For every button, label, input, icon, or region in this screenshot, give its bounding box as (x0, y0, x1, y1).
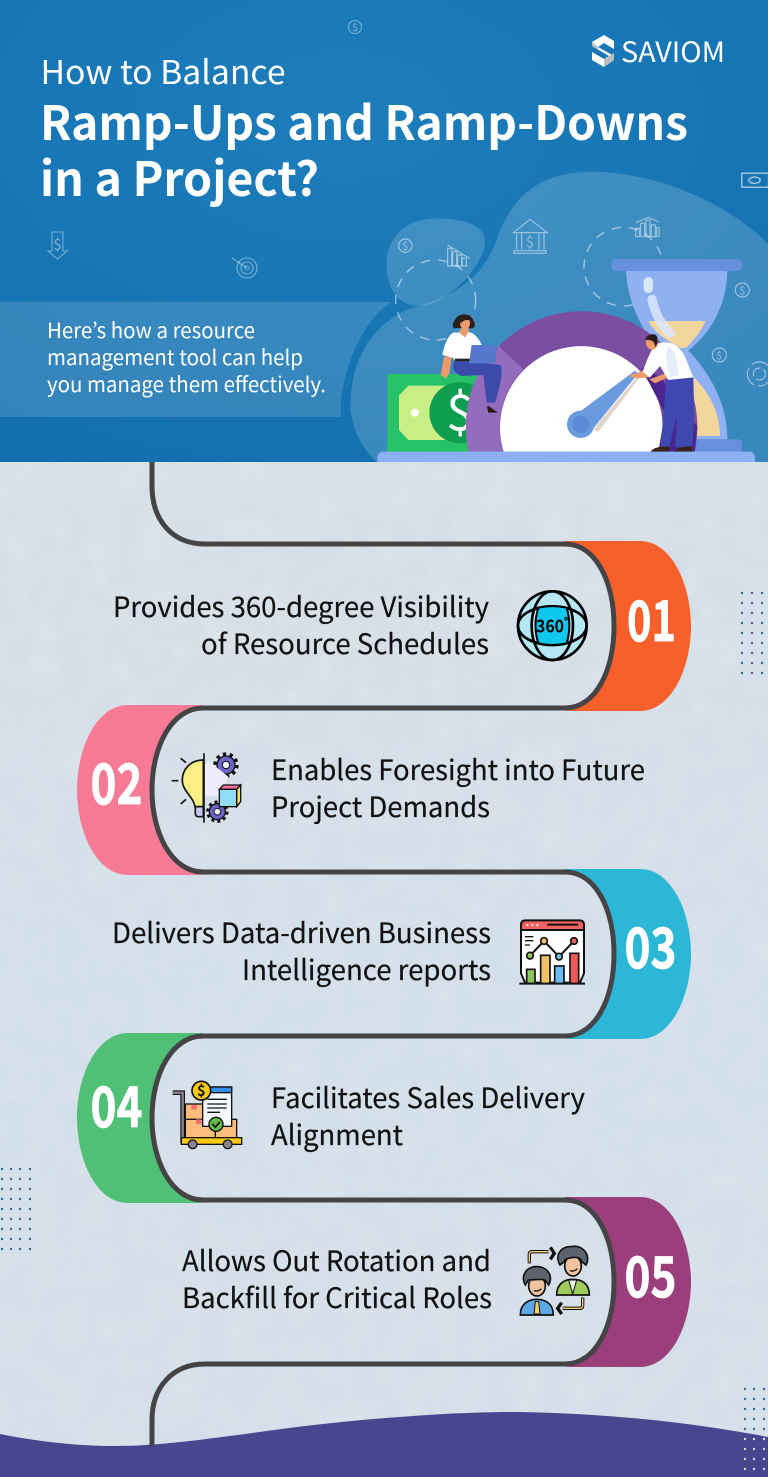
title: Ramp-Ups and Ramp-Downs (40, 85, 688, 154)
tab 04: 04 (90, 1063, 142, 1144)
step 2 text: Enables Foresight into Future (271, 749, 645, 789)
base platform (377, 452, 755, 462)
icon: coin right 1 (735, 283, 749, 298)
page background (0, 462, 768, 1477)
banknote: $ (446, 374, 474, 446)
icon: dollar coin top (348, 19, 362, 34)
step 1 text: Provides 360-degree Visibility (113, 586, 489, 626)
icon: coin right 1: $ (739, 283, 745, 298)
step 5 text: Allows Out Rotation and (182, 1240, 491, 1280)
tab 02 (77, 705, 203, 875)
tab 02: 02 (90, 740, 142, 821)
subtitle panel (0, 302, 392, 417)
subtitle text (47, 315, 326, 399)
icon: down arrow dollar: $ (53, 234, 62, 255)
illustration backdrop blobs (350, 172, 768, 462)
speedometer gauge (466, 311, 697, 452)
decorative dot grids (2, 593, 762, 1250)
person: woman with laptop (441, 314, 502, 413)
banknote (387, 374, 491, 452)
step 3 text: Delivers Data-driven Business (112, 912, 491, 952)
tab 04 (77, 1033, 203, 1203)
icon: down arrow dollar (48, 232, 67, 259)
title: How to Balance (40, 46, 286, 94)
tab 05: 05 (624, 1233, 676, 1314)
icon: dollar coin top: $ (352, 19, 358, 34)
dashed circles (396, 227, 663, 340)
panel: header (0, 0, 768, 462)
subtitle text: you manage them effectively. (47, 369, 326, 399)
icon: 360 globe: 360 (536, 613, 564, 639)
icon: bank: $ (526, 231, 534, 252)
title: in a Project? (40, 141, 319, 210)
title (40, 46, 688, 210)
logo: Saviom: SAVIOM (621, 31, 725, 71)
step 4 text: Facilitates Sales Delivery (271, 1077, 585, 1117)
tab 03: 03 (624, 904, 676, 985)
step 2 text: Project Demands (271, 786, 490, 826)
illustration: gauge, hourglass and people (377, 173, 768, 462)
subtitle text: management tool can help (47, 342, 303, 372)
icon: coin: $ (402, 239, 408, 254)
icon: coin right 2 (712, 348, 726, 363)
icon: target (232, 258, 257, 278)
decorative dot grid over wave (745, 1389, 764, 1471)
tab 03 (565, 869, 691, 1039)
step 5 text (182, 1240, 492, 1317)
icon: banknote right (742, 173, 768, 187)
icon: rising bar chart (635, 217, 659, 237)
step 4 text (271, 1077, 585, 1154)
subtitle text: Here’s how a resource (47, 315, 255, 345)
step 3 text (112, 912, 491, 989)
icon: banknote (742, 173, 768, 187)
tab 01: 01 (627, 577, 676, 658)
icon: delivery cart (173, 1080, 242, 1149)
icon: circular arrows (747, 362, 768, 386)
ribbon path (152, 462, 614, 1446)
step 5 text: Backfill for Critical Roles (182, 1277, 492, 1317)
icon: lightbulb and gears (172, 753, 241, 823)
icon: bank (513, 219, 547, 253)
bottom wave (0, 1412, 768, 1477)
step 1 text: of Resource Schedules (201, 623, 489, 663)
step 3 text: Intelligence reports (242, 949, 491, 989)
tab 01 (565, 541, 691, 711)
icon: analytics window (519, 920, 585, 984)
icon: delivery cart: $ (197, 1080, 206, 1101)
tab 05 (565, 1197, 691, 1367)
icon: coin right 2: $ (716, 348, 722, 363)
hourglass (611, 259, 742, 452)
icon: coin (399, 239, 412, 254)
person: man (628, 334, 694, 452)
icon: 360 globe (518, 591, 587, 660)
icon: falling bar chart (447, 245, 469, 266)
step 2 text (271, 749, 645, 826)
step 1 text (113, 586, 489, 663)
icon: role rotation people (520, 1246, 589, 1315)
step 4 text: Alignment (271, 1114, 403, 1154)
